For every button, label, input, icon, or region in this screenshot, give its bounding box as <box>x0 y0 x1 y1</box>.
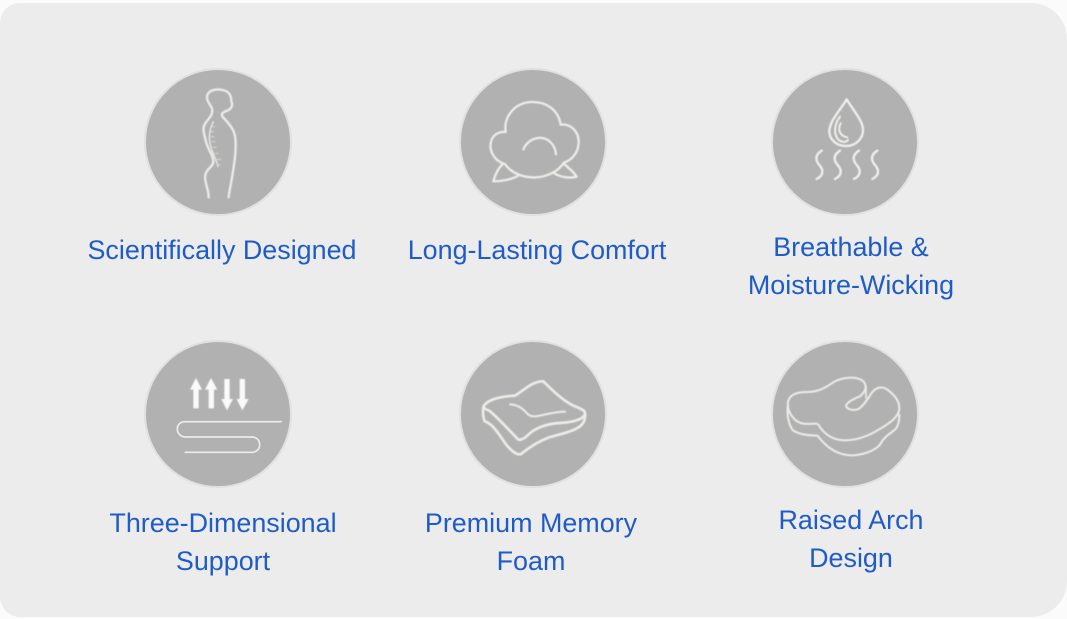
label: Raised Arch Design: Design <box>809 543 893 573</box>
label: Three-Dimensional Support: Three-Dimensional <box>109 508 337 538</box>
label: Breathable & Moisture-Wicking: Breathable & <box>773 232 929 262</box>
label: Premium Memory Foam: Foam <box>497 546 565 576</box>
label: Raised Arch Design <box>778 505 923 573</box>
label: Three-Dimensional Support: Support <box>176 546 270 576</box>
label: Breathable & Moisture-Wicking <box>748 232 954 300</box>
icon: spine and body profile <box>145 69 291 215</box>
icon: soft cloud cushion <box>460 69 606 215</box>
icon: arrows and layered support <box>145 341 291 487</box>
label: Long-Lasting Comfort: Long-Lasting Comfort <box>408 235 666 265</box>
icon: raised arch cushion <box>772 341 918 487</box>
label: Breathable & Moisture-Wicking: Moisture-Wicking <box>748 270 954 300</box>
label: Scientifically Designed: Scientifically Designed <box>87 235 357 265</box>
label: Raised Arch Design: Raised Arch <box>778 505 923 535</box>
icon: memory foam slab <box>460 341 606 487</box>
label: Three-Dimensional Support <box>109 508 337 576</box>
label: Premium Memory Foam <box>425 508 637 576</box>
label: Premium Memory Foam: Premium Memory <box>425 508 637 538</box>
icon: water drop and vapour <box>772 69 918 215</box>
